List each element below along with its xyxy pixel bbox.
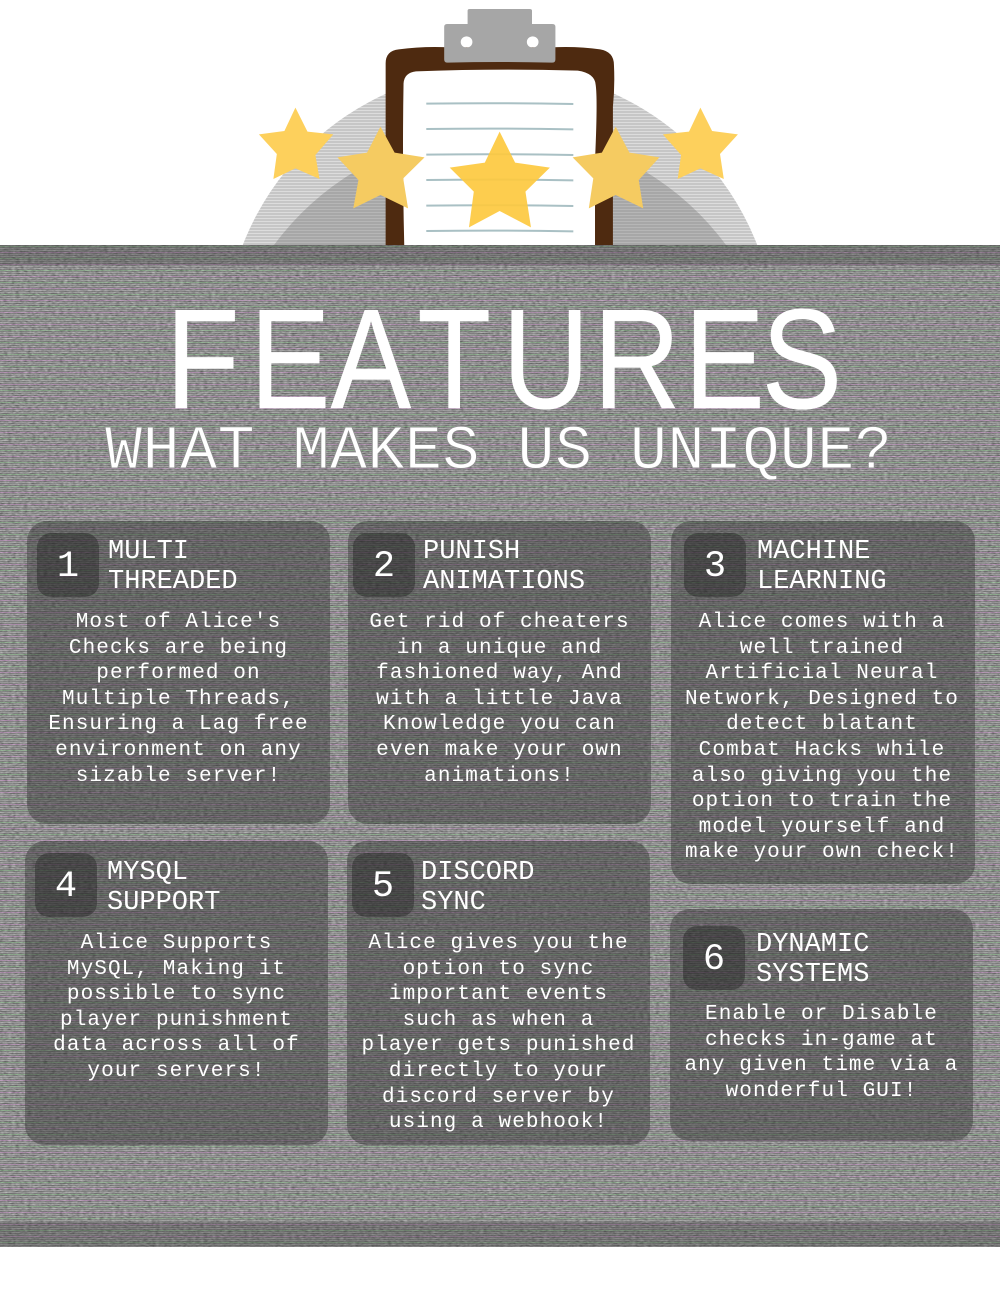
body text 1: Ensuring a Lag free bbox=[48, 713, 309, 736]
body text 5: Alice gives you the bbox=[368, 932, 629, 955]
body text 3: Alice comes with a bbox=[699, 611, 945, 634]
panel: 5 discord sync bbox=[347, 841, 650, 1145]
body text 6: wonderful GUI! bbox=[726, 1080, 917, 1103]
body text 4: player punishment bbox=[60, 1009, 293, 1032]
body text 3: detect blatant bbox=[726, 713, 918, 736]
body text 1: performed on bbox=[96, 662, 261, 685]
body text 4: MySQL, Making it bbox=[67, 958, 286, 981]
body text 2: animations! bbox=[424, 765, 575, 788]
body text 2: fashioned way, And bbox=[376, 662, 623, 685]
number badge 5: 5 bbox=[372, 866, 394, 908]
number badge 3: 3 bbox=[704, 546, 726, 588]
icon: star 5 bbox=[663, 108, 738, 179]
body text 6: checks in-game at bbox=[705, 1029, 938, 1052]
body text 5: important events bbox=[389, 983, 608, 1006]
number badge 1: 1 bbox=[57, 546, 79, 588]
heading 4: SUPPORT bbox=[107, 888, 220, 918]
body text 3: well trained bbox=[740, 637, 904, 660]
heading 2: ANIMATIONS bbox=[423, 567, 585, 597]
body text 1: environment on any bbox=[55, 739, 302, 762]
body text 3: Combat Hacks while bbox=[699, 739, 945, 762]
body text 1: Most of Alice's bbox=[76, 611, 281, 634]
arc: outer semicircle bbox=[242, 94, 758, 245]
body text 4: Alice Supports bbox=[81, 932, 272, 955]
body text 3: Network, Designed to bbox=[685, 688, 959, 711]
body text 5: discord server by bbox=[382, 1086, 615, 1109]
panel: 3 machine learning bbox=[671, 521, 975, 884]
body text 4: your servers! bbox=[87, 1060, 266, 1083]
body text 5: such as when a bbox=[403, 1009, 594, 1032]
body text 6 bbox=[684, 1003, 959, 1103]
number badge 4 bbox=[35, 853, 97, 917]
body text 4: data across all of bbox=[53, 1034, 300, 1057]
body text 2: even make your own bbox=[376, 739, 623, 762]
icon: clipboard board bbox=[386, 47, 614, 245]
number badge 6 bbox=[683, 926, 745, 990]
body text 3: model yourself and bbox=[699, 816, 945, 839]
subtitle: WHAT MAKES US UNIQUE? bbox=[105, 416, 892, 487]
icon: star 1 bbox=[259, 108, 333, 179]
body text 6: any given time via a bbox=[684, 1054, 959, 1077]
body text 4 bbox=[53, 932, 300, 1083]
heading 6: DYNAMIC bbox=[756, 930, 869, 960]
icon: clip bbox=[444, 9, 555, 63]
heading 3: LEARNING bbox=[757, 567, 887, 597]
heading 1: MULTI bbox=[108, 537, 189, 567]
icon: star 3 bbox=[450, 132, 550, 227]
body text 5: using a webhook! bbox=[389, 1111, 608, 1134]
body text 5 bbox=[361, 932, 636, 1134]
heading 6 bbox=[756, 930, 869, 990]
body text 2: Get rid of cheaters bbox=[369, 611, 630, 634]
heading 1 bbox=[108, 537, 238, 597]
body text 3: Artificial Neural bbox=[706, 662, 938, 685]
body text 5: option to sync bbox=[403, 958, 594, 981]
number badge 4: 4 bbox=[55, 866, 77, 908]
body text 1: Checks are being bbox=[69, 637, 288, 660]
body text 3: option to train the bbox=[692, 790, 952, 813]
body text 2: in a unique and bbox=[397, 637, 602, 660]
heading 2 bbox=[423, 537, 585, 597]
body text 2 bbox=[369, 611, 630, 788]
body text 3 bbox=[685, 611, 959, 864]
body text 3: make your own check! bbox=[685, 841, 959, 864]
number badge 2: 2 bbox=[373, 546, 395, 588]
body text 1 bbox=[48, 611, 309, 788]
heading 5: SYNC bbox=[421, 888, 486, 918]
body text 4: possible to sync bbox=[67, 983, 286, 1006]
icon: star 2 bbox=[337, 127, 425, 208]
body text 1: sizable server! bbox=[76, 765, 281, 788]
icon: paper lines bbox=[426, 103, 573, 231]
number badge 2 bbox=[353, 533, 415, 597]
heading 5: DISCORD bbox=[421, 858, 534, 888]
body text 1: Multiple Threads, bbox=[62, 688, 295, 711]
body text 6: Enable or Disable bbox=[705, 1003, 938, 1026]
body text 2: Knowledge you can bbox=[383, 713, 616, 736]
number badge 1 bbox=[37, 533, 99, 597]
heading 4 bbox=[107, 858, 220, 918]
body text 2: with a little Java bbox=[376, 688, 623, 711]
icon: star 4 bbox=[573, 127, 659, 208]
title: FEATURES bbox=[166, 280, 842, 438]
number badge 5 bbox=[352, 853, 414, 917]
number badge 6: 6 bbox=[703, 939, 725, 981]
body text 5: player gets punished bbox=[361, 1034, 636, 1057]
body text 3: also giving you the bbox=[692, 765, 952, 788]
body text 5: directly to your bbox=[389, 1060, 608, 1083]
panel: 6 dynamic systems bbox=[670, 909, 973, 1141]
panel: 4 mysql support bbox=[25, 841, 328, 1145]
panel: 2 punish animations bbox=[348, 521, 651, 824]
title: FEATURES and subtitle bbox=[104, 280, 892, 487]
heading 1: THREADED bbox=[108, 567, 238, 597]
heading 6: SYSTEMS bbox=[756, 960, 869, 990]
heading 4: MYSQL bbox=[107, 858, 188, 888]
heading 3: MACHINE bbox=[757, 537, 870, 567]
number badge 3 bbox=[684, 533, 746, 597]
illustration: clipboard with stars bbox=[242, 9, 758, 245]
heading 3 bbox=[757, 537, 887, 597]
heading 2: PUNISH bbox=[423, 537, 520, 567]
panel: 1 multi threaded bbox=[27, 521, 330, 824]
heading 5 bbox=[421, 858, 534, 918]
icon: paper sheet bbox=[403, 70, 597, 245]
arc: inner semicircle bbox=[274, 172, 726, 245]
